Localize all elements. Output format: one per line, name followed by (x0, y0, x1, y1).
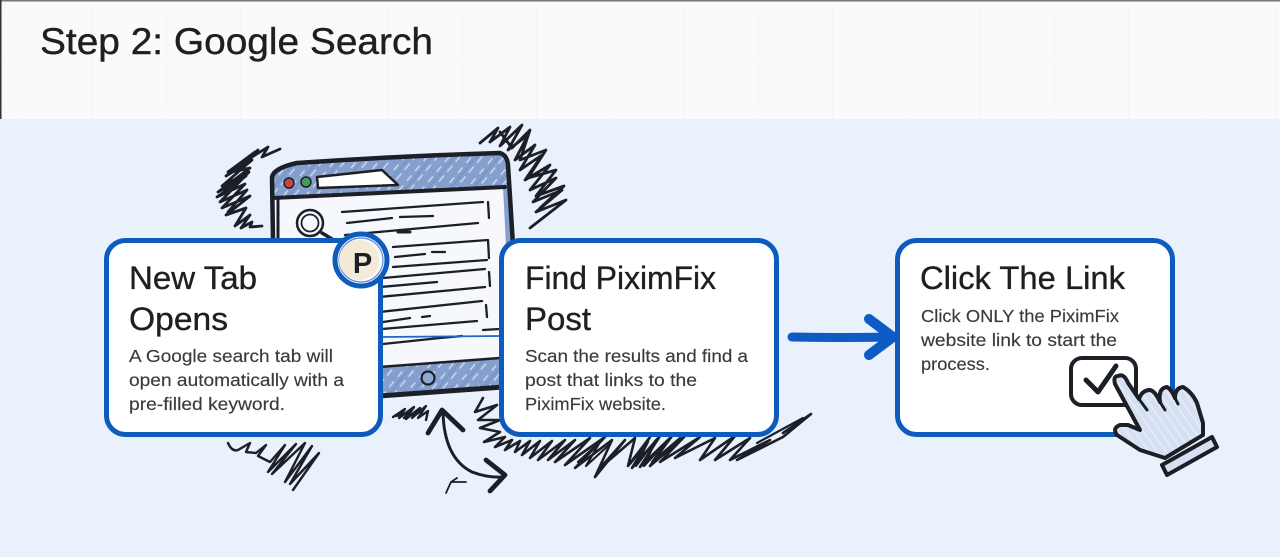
browser bottom bar (379, 358, 503, 395)
card: Find PiximFix Post (502, 240, 776, 434)
card: Click The Link: website link to start the (920, 330, 1117, 350)
icon: magnifier (297, 210, 332, 239)
illustration: browser window with scribbles (217, 125, 811, 493)
results lines (342, 202, 499, 344)
card: Find PiximFix Post: PiximFix website. (525, 394, 666, 414)
address bar (317, 170, 398, 188)
card: New Tab Opens: Opens (129, 301, 228, 337)
home button (422, 372, 434, 384)
arrow: step 2 to step 3 (792, 319, 893, 355)
scribble: long bottom right (475, 398, 811, 477)
card: New Tab Opens: pre-filled keyword. (129, 394, 285, 414)
card: Find PiximFix Post: Find PiximFix (525, 260, 716, 296)
header band (0, 0, 1280, 119)
card: Click The Link: process. (921, 354, 990, 374)
curved double arrow (428, 410, 505, 493)
badge: P: P (353, 248, 372, 280)
icon: checkbox (1071, 358, 1136, 405)
browser title bar (273, 153, 507, 198)
card: Click The Link: Click ONLY the PiximFix (921, 306, 1119, 326)
scribble: top right (480, 125, 566, 228)
browser right strip (503, 187, 513, 245)
content background (0, 119, 1280, 557)
card: Find PiximFix Post: Scan the results and find a (525, 346, 748, 366)
browser frame outline (272, 153, 513, 245)
card: Find PiximFix Post: Post (525, 301, 591, 337)
card: Find PiximFix Post: post that links to the (525, 370, 697, 390)
browser body (275, 187, 505, 396)
title: Step 2: Google Search (40, 21, 433, 62)
scribble: under browser (393, 406, 428, 420)
window buttons (284, 178, 294, 188)
icon: pointing hand (1114, 375, 1217, 475)
card: New Tab Opens: New Tab (129, 260, 257, 296)
card: Click The Link: Click The Link (920, 260, 1126, 296)
badge: P (335, 234, 387, 286)
card: New Tab Opens: A Google search tab will (129, 346, 333, 366)
scribble: top left (217, 147, 280, 228)
scribble: bottom left (228, 443, 319, 490)
card: New Tab Opens: open automatically with a (129, 370, 344, 390)
card: New Tab Opens (106, 240, 380, 434)
card: Click The Link (898, 240, 1172, 434)
